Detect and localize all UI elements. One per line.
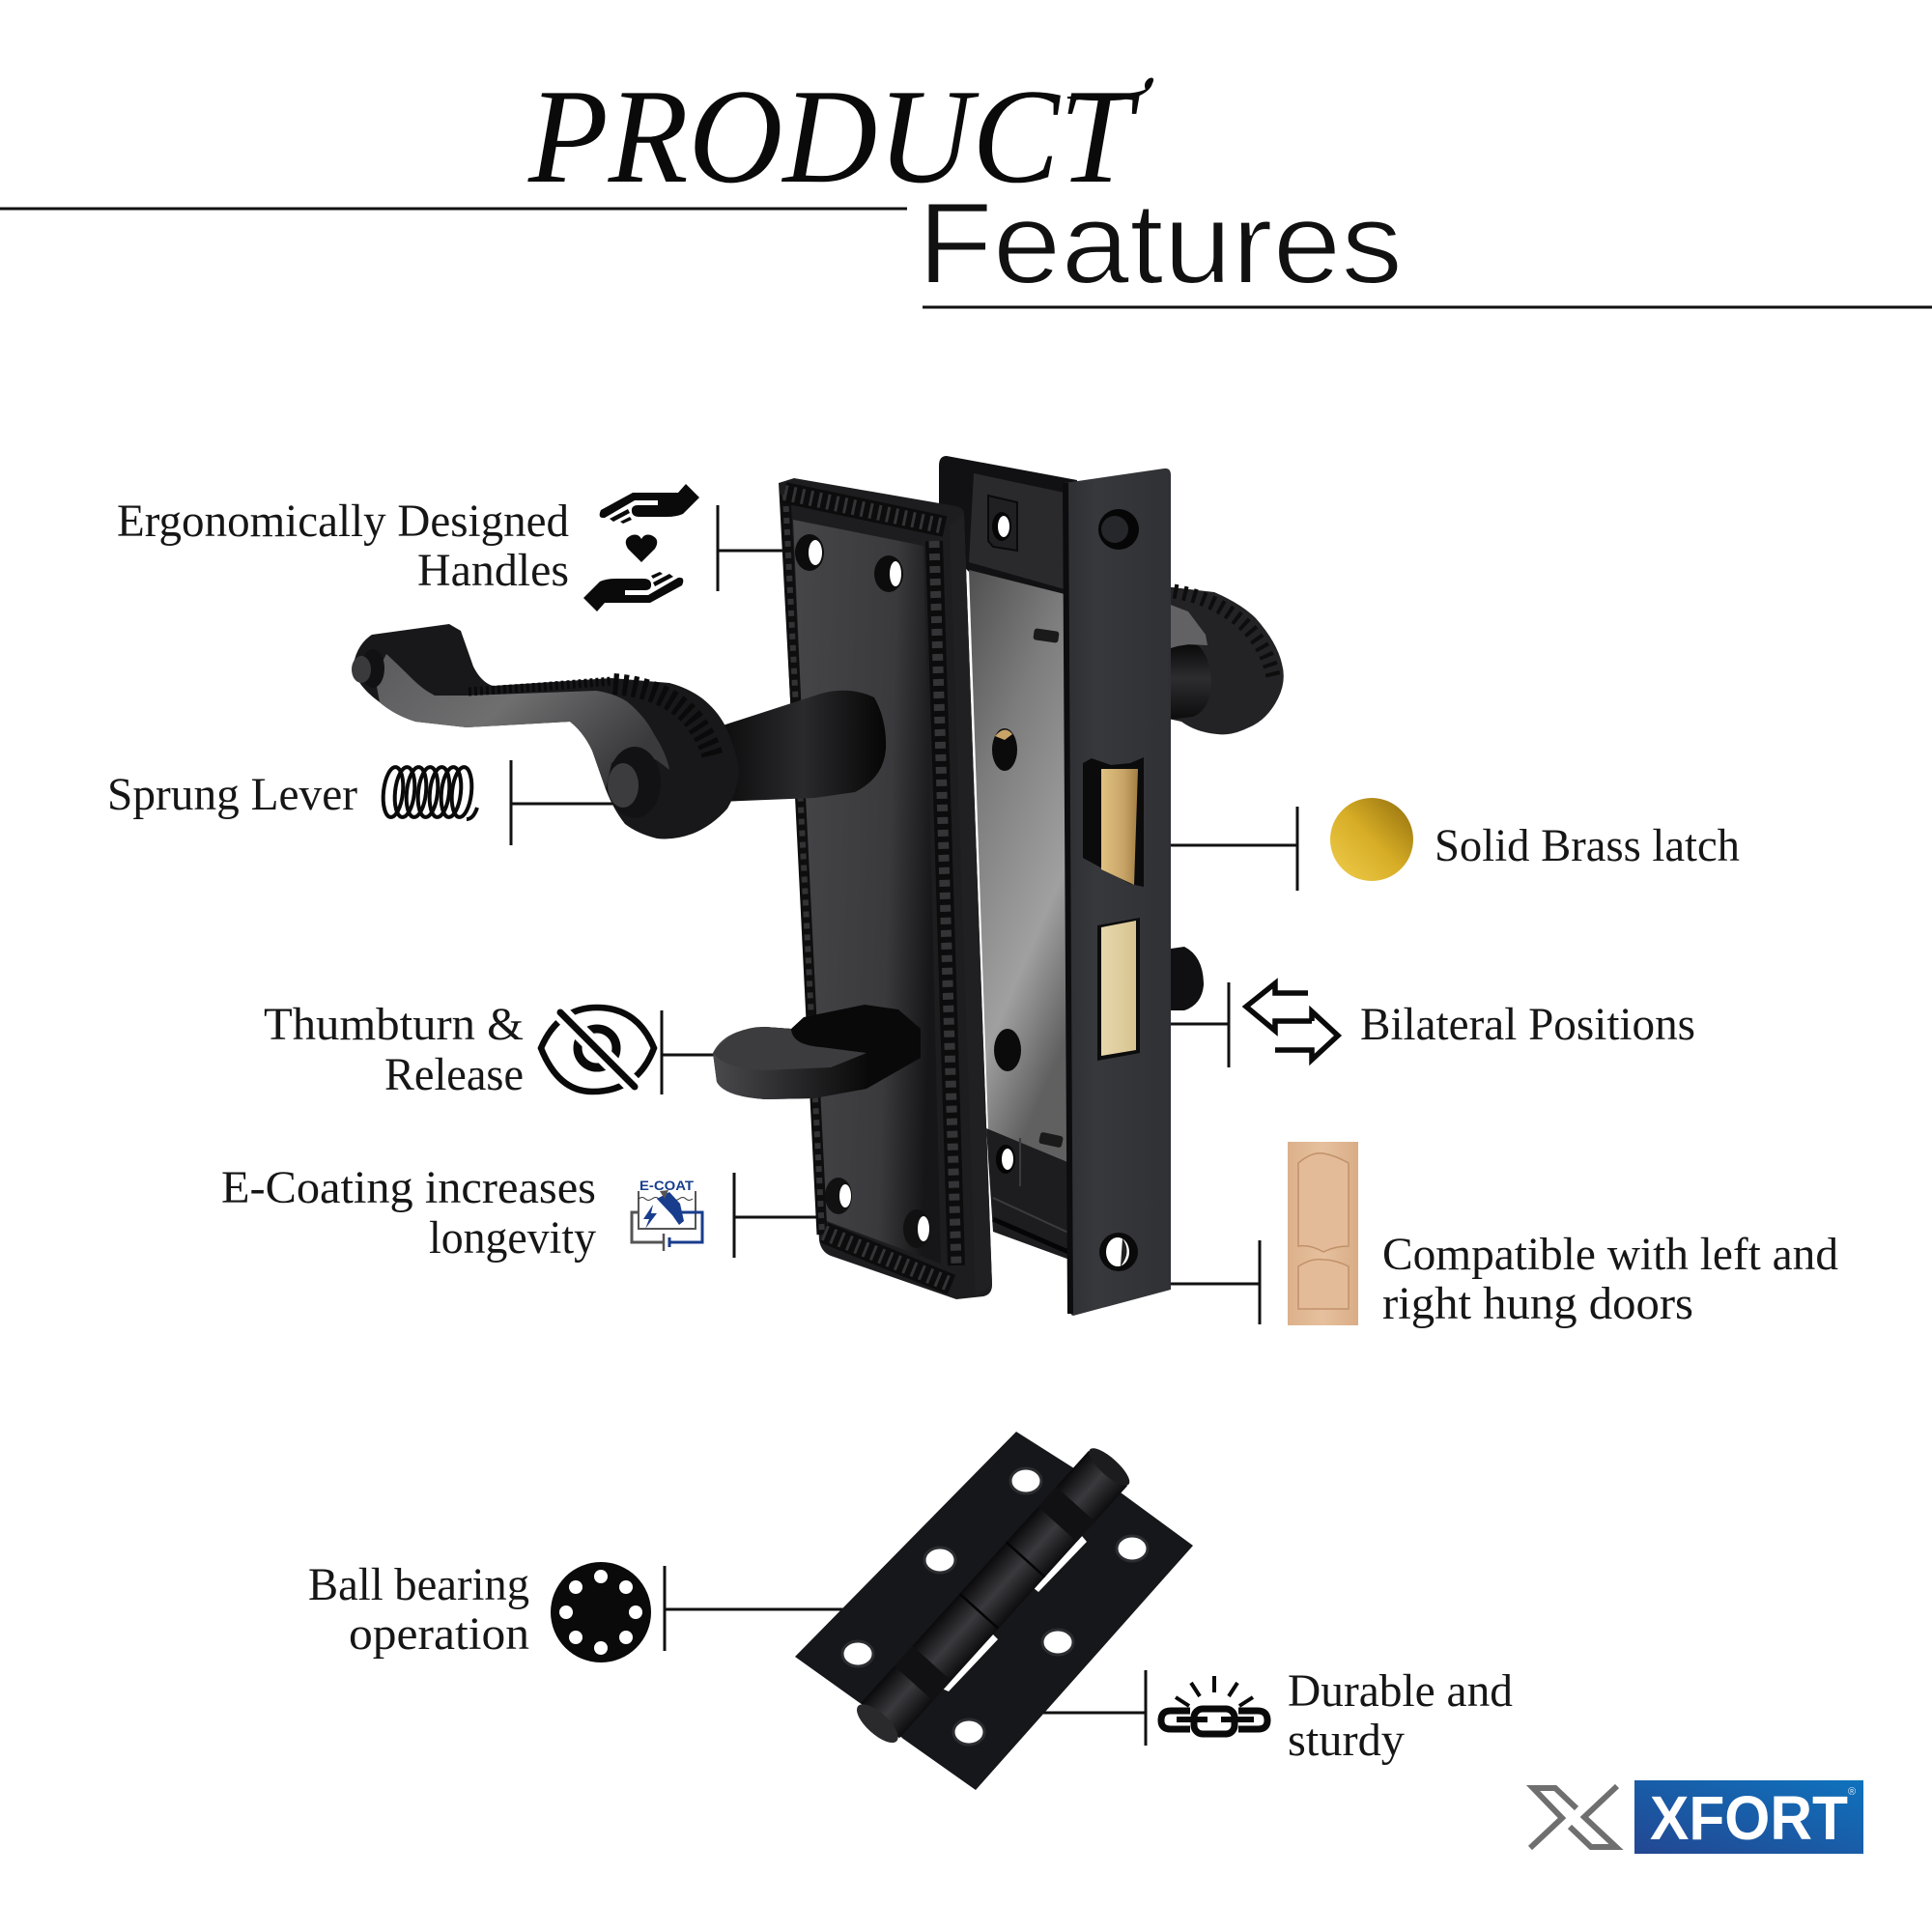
label: e-coating: longevity <box>429 1212 596 1264</box>
title <box>0 62 1932 308</box>
icon: spring <box>381 766 477 819</box>
lever tip pin <box>352 649 384 688</box>
icon: brass coin <box>1330 798 1413 881</box>
label: ball bearing: Ball bearing <box>308 1559 529 1610</box>
label: thumbturn and release: Release <box>384 1049 524 1100</box>
mortice case body <box>969 570 1072 1169</box>
hinge <box>795 1432 1193 1790</box>
label: e-coating: E-Coating increases <box>221 1162 596 1213</box>
faceplate screw holes <box>1098 509 1139 1271</box>
door rose plate <box>779 478 992 1299</box>
label: compatible doors: Compatible with left and <box>1382 1229 1838 1280</box>
label: solid brass latch: Solid Brass latch <box>1435 820 1740 871</box>
logo wordmark: ® <box>1848 1786 1856 1798</box>
icon: e-coat: E-COAT <box>639 1178 694 1193</box>
logo: xfort <box>1530 1780 1863 1854</box>
label: e-coating <box>221 1162 596 1264</box>
hinge screw holes <box>842 1468 1148 1745</box>
mortice back bracket top <box>939 456 1077 604</box>
label: compatible doors: right hung doors <box>1382 1278 1693 1329</box>
bilateral rear stub <box>1171 947 1204 1010</box>
label: ball bearing <box>308 1559 529 1660</box>
label: thumbturn and release <box>264 999 524 1100</box>
bracket screw holes <box>992 512 1015 1174</box>
lever light face <box>375 654 669 789</box>
hinge leaves <box>795 1432 1193 1790</box>
label: durable and sturdy <box>1288 1665 1513 1766</box>
label: sprung lever: Sprung Lever <box>107 769 357 820</box>
faceplate <box>1065 469 1171 1316</box>
rose screw holes <box>795 534 930 1248</box>
hinge knuckle <box>851 1443 1134 1748</box>
icon: door <box>1288 1142 1358 1325</box>
label: ergonomically designed handles <box>117 496 569 596</box>
icon: e-coat <box>632 1178 702 1251</box>
case holes and marks <box>992 628 1064 1148</box>
bracket details <box>993 1138 1068 1252</box>
title: PRODUCT <box>527 62 1141 212</box>
label: ergonomically designed handles: Handles <box>417 545 569 596</box>
label: ergonomically designed handles: Ergonomically Designed <box>117 496 569 547</box>
callout connector lines <box>511 505 1297 1746</box>
bracket lower <box>986 1128 1072 1261</box>
lever dark body <box>353 624 739 838</box>
rear knob <box>1164 586 1284 734</box>
lever handle <box>352 624 886 838</box>
label: ball bearing: operation <box>349 1608 529 1660</box>
icon: chain <box>1161 1676 1267 1734</box>
mortice lock assembly <box>352 456 1284 1316</box>
upper latch slot <box>1083 757 1144 887</box>
title: Features <box>918 179 1403 308</box>
lever rope ribs <box>469 681 713 758</box>
label: thumbturn and release: Thumbturn & <box>264 999 524 1050</box>
icon: arrows bilateral <box>1246 983 1338 1060</box>
lever hub <box>608 747 661 818</box>
label: durable and sturdy: Durable and <box>1288 1665 1513 1717</box>
thumbturn <box>713 1005 921 1099</box>
bracket tab <box>988 496 1017 551</box>
label: compatible doors <box>1382 1229 1838 1329</box>
hinge slots <box>942 1536 1087 1691</box>
lower bolt <box>1097 918 1140 1061</box>
icon: hands and heart <box>583 484 699 611</box>
icon: ball bearing <box>551 1562 651 1662</box>
logo wordmark: XFORT <box>1650 1783 1848 1853</box>
label: bilateral positions: Bilateral Positions <box>1360 999 1695 1050</box>
logo mark <box>1530 1786 1617 1848</box>
bracket tray <box>969 473 1065 589</box>
icon: eye crossed <box>541 1007 654 1094</box>
rope border <box>784 493 956 1285</box>
label: durable and sturdy: sturdy <box>1288 1715 1405 1766</box>
